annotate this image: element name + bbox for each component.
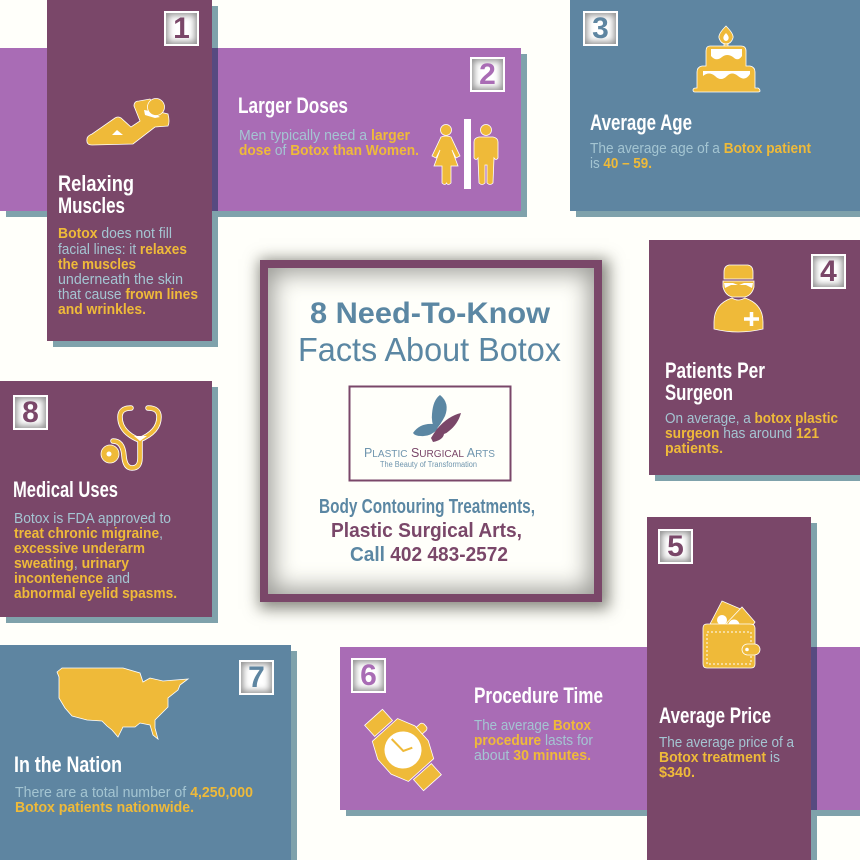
number 7: 7 xyxy=(248,661,265,694)
logo: Plastic Surgical Arts: PLASTIC SURGICAL ARTS xyxy=(364,445,495,460)
heading: In the Nation: In the Nation xyxy=(14,752,122,777)
icon: woman and man xyxy=(432,119,498,189)
text: relaxing muscles body xyxy=(58,226,198,318)
heading: Patients Per Surgeon: Patients Per xyxy=(665,358,765,383)
heading: Medical Uses: Medical Uses xyxy=(13,477,118,502)
text: relaxing muscles body: Botox does not fill xyxy=(58,226,172,242)
icon: reclining person xyxy=(87,98,169,145)
number 2 xyxy=(470,57,505,92)
text: patients per surgeon body: surgeon has around 121 xyxy=(665,426,819,442)
text: medical uses body: treat chronic migraine, xyxy=(14,526,163,542)
panel 6: procedure time xyxy=(340,647,860,810)
panel 7: in the nation xyxy=(0,645,291,860)
text: in the nation body xyxy=(15,785,253,816)
number 1 xyxy=(164,11,199,46)
icon: stethoscope xyxy=(101,408,159,468)
number 8 xyxy=(13,395,48,430)
text: patients per surgeon body: patients. xyxy=(665,441,723,457)
title: Facts About Botox xyxy=(298,331,561,368)
text: relaxing muscles body: that cause frown lines xyxy=(58,287,198,303)
text: medical uses body: incontenence and xyxy=(14,571,130,587)
text: relaxing muscles body: the muscles xyxy=(58,257,136,273)
text: procedure time body: procedure lasts for xyxy=(474,733,593,749)
text: average price body xyxy=(659,735,795,781)
text: relaxing muscles body: underneath the skin xyxy=(58,272,183,288)
icon: wallet with money xyxy=(703,601,760,668)
icon: butterfly xyxy=(413,395,461,442)
text: average price body: The average price of a xyxy=(659,735,795,751)
heading: Patients Per Surgeon: Surgeon xyxy=(665,380,733,405)
panel 1 shadow over panel 2 xyxy=(212,48,218,211)
icon: birthday cake xyxy=(693,26,760,92)
number 3: 3 xyxy=(592,12,609,45)
contact text: Call 402 483-2572 xyxy=(350,543,508,566)
heading: Relaxing Muscles: Relaxing xyxy=(58,171,134,196)
number 5 xyxy=(658,529,693,564)
text: average age body: is 40 – 59. xyxy=(590,156,652,172)
text: in the nation body: Botox patients nationwide. xyxy=(15,800,194,816)
text: medical uses body: Botox is FDA approved to xyxy=(14,511,171,527)
text: relaxing muscles body: facial lines: it relaxes xyxy=(58,242,187,258)
icon: USA map xyxy=(57,668,188,739)
number 4: 4 xyxy=(820,255,837,288)
panel 2: larger doses xyxy=(0,48,521,211)
panel 3: average age xyxy=(570,0,860,211)
text: larger doses body: dose of Botox than Women. xyxy=(239,143,419,159)
text: in the nation body: There are a total number of 4,250,000 xyxy=(15,785,253,801)
number 6: 6 xyxy=(360,659,377,692)
center panel: title and logo xyxy=(260,260,602,602)
title xyxy=(298,297,561,368)
panel 4: patients per surgeon xyxy=(649,240,860,475)
title: 8 Need-To-Know xyxy=(310,297,551,330)
text: medical uses body xyxy=(14,511,177,602)
text: procedure time body: about 30 minutes. xyxy=(474,748,591,764)
number 2: 2 xyxy=(479,58,496,91)
heading: Larger Doses: Larger Doses xyxy=(238,93,348,118)
text: average age body xyxy=(590,141,811,172)
number 4 xyxy=(811,254,846,289)
text: average price body: $340. xyxy=(659,765,695,781)
text: average price body: Botox treatment is xyxy=(659,750,780,766)
panel 5: average price xyxy=(647,517,811,860)
logo: Plastic Surgical Arts xyxy=(350,386,510,480)
heading: Patients Per Surgeon xyxy=(665,358,765,405)
text: patients per surgeon body xyxy=(665,411,838,457)
number 7 xyxy=(239,660,274,695)
text: relaxing muscles body: and wrinkles. xyxy=(58,302,146,318)
text: medical uses body: abnormal eyelid spasms. xyxy=(14,586,177,602)
heading: Relaxing Muscles: Muscles xyxy=(58,193,125,218)
number 3 xyxy=(583,11,618,46)
icon: wristwatch xyxy=(355,695,457,799)
heading: Average Age: Average Age xyxy=(590,110,692,135)
text: patients per surgeon body: On average, a botox plastic xyxy=(665,411,838,427)
text: larger doses body: Men typically need a larger xyxy=(239,128,410,144)
panel 5 shadow over panel 6 xyxy=(811,647,817,810)
contact text xyxy=(319,495,535,566)
panel 1: relaxing muscles xyxy=(47,0,212,341)
text: procedure time body: The average Botox xyxy=(474,718,591,734)
heading: Average Price: Average Price xyxy=(659,703,771,728)
number 8: 8 xyxy=(22,396,39,429)
heading: Relaxing Muscles xyxy=(58,171,134,218)
text: larger doses body xyxy=(239,128,419,159)
text: medical uses body: excessive underarm xyxy=(14,541,145,557)
number 6 xyxy=(351,658,386,693)
text: medical uses body: sweating, urinary xyxy=(14,556,129,572)
heading: Procedure Time: Procedure Time xyxy=(474,683,603,708)
number 5: 5 xyxy=(667,530,684,563)
contact text: Plastic Surgical Arts, xyxy=(331,519,522,542)
text: procedure time body xyxy=(474,718,593,764)
number 1: 1 xyxy=(173,12,190,45)
text: average age body: The average age of a Botox patient xyxy=(590,141,811,157)
panel 8: medical uses xyxy=(0,381,212,617)
icon: surgeon xyxy=(714,265,763,332)
logo: Plastic Surgical Arts: The Beauty of Transformation xyxy=(380,460,477,469)
